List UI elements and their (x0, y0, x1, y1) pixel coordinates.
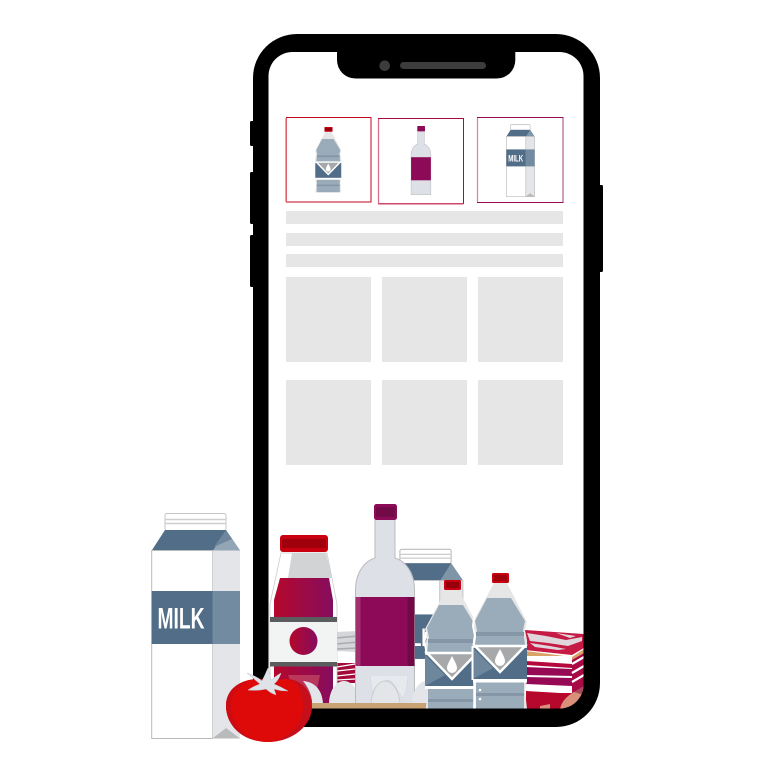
placeholder text lines (286, 211, 563, 267)
milk carton behind: MILK (394, 624, 433, 652)
carton cap (165, 514, 226, 530)
speaker (400, 62, 486, 69)
carton body (152, 550, 240, 738)
tomato stem (247, 668, 288, 695)
side buttons (250, 121, 603, 287)
wine bottle base moulding (370, 676, 408, 698)
groceries inside phone (270, 504, 584, 708)
panel: selected product wine (378, 118, 464, 204)
wooden board (312, 703, 426, 708)
phone frame (253, 34, 600, 727)
tomato (226, 668, 312, 742)
red juice bottle (270, 535, 337, 705)
panel: selected product water (286, 118, 371, 202)
milk carton large (152, 514, 240, 738)
water bottle right (472, 573, 527, 709)
label: MILK: MILK (508, 153, 523, 164)
panel: selected product milk (478, 118, 563, 202)
label: MILK: MILK (158, 603, 205, 636)
egg left (329, 681, 355, 703)
notch (337, 51, 515, 78)
icon: water bottle thumbnail (315, 127, 341, 192)
egg middle (371, 681, 400, 706)
placeholder product grid (286, 277, 563, 465)
water bottle left (424, 580, 475, 708)
meat left (337, 631, 355, 683)
milk carton behind (399, 548, 464, 659)
egg right (414, 681, 427, 703)
carton roof (152, 530, 240, 550)
meat right (525, 630, 584, 709)
wine bottle (356, 504, 414, 709)
icon: wine bottle thumbnail (411, 126, 431, 195)
camera (379, 60, 390, 71)
phone screen (268, 52, 584, 708)
phone (250, 34, 603, 727)
